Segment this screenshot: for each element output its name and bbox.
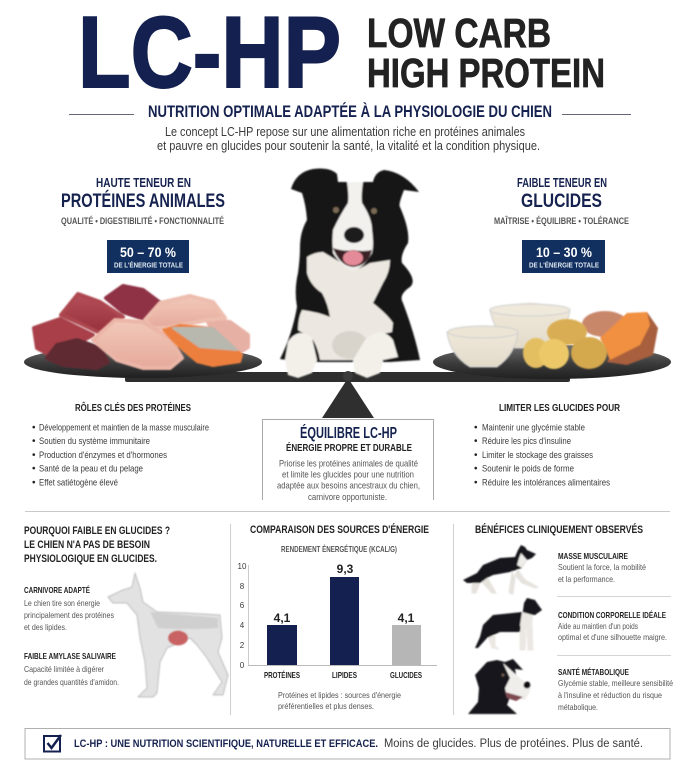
block: carnivore: et des lipides. (24, 622, 67, 632)
list: protein roles: Santé de la peau et du pelage (39, 464, 143, 474)
list: limit carbs: Réduire les intolérances alimentaires (482, 478, 610, 488)
footer banner: Moins de glucides. Plus de protéines. Plus de santé. (384, 738, 643, 750)
title: low carb high protein: HIGH PROTEIN (367, 50, 605, 96)
bar: lipids: 9,3 (337, 562, 354, 576)
chest shading (332, 331, 368, 359)
paws (285, 332, 398, 378)
chart note (278, 690, 401, 711)
panel: balance box: carnivore opportuniste. (308, 492, 387, 503)
central dog (280, 169, 420, 378)
icon: dog head (468, 659, 531, 714)
icon: running dog (463, 545, 538, 594)
panel: proteins heading: PROTÉINES ANIMALES (61, 189, 225, 212)
list: limit carbs: LIMITER LES GLUCIDES POUR (499, 403, 621, 414)
list: protein roles: RÔLES CLÉS DES PROTÉINES (75, 401, 191, 414)
icon: checkbox (44, 735, 61, 752)
panel: carbs heading: MAÎTRISE • ÉQUILIBRE • TOLÉRANCE (494, 215, 629, 226)
left plate with proteins (24, 286, 262, 378)
text: body condition (558, 610, 667, 642)
rice bowls (447, 302, 570, 367)
callout: 10-30% (522, 240, 605, 273)
list: protein roles: Production d'énzymes et d'hormones (39, 450, 167, 461)
panel: proteins heading: QUALITÉ • DIGESTIBILITÉ • FONCTIONNALITÉ (61, 216, 224, 226)
axes: 4 (240, 621, 245, 630)
block: amylase (24, 651, 119, 687)
icon: standing dog (475, 598, 542, 650)
bar: proteins (264, 611, 300, 680)
panel: proteins heading: HAUTE TENEUR EN (96, 175, 191, 190)
list: protein roles: Soutien du système immunitaire (39, 436, 150, 447)
panel: balance box: adaptée aux besoins ancestraux du chien, (277, 480, 420, 492)
panel: carbs heading: GLUCIDES (521, 190, 602, 212)
block: amylase: de grandes quantités d'amidon. (24, 677, 119, 687)
bar: lipids: LIPIDES (332, 670, 357, 680)
bar: lipids (330, 562, 359, 680)
title: LC-HP: LC-HP (78, 0, 341, 109)
text: metabolic health: métabolique. (558, 702, 598, 712)
list: protein roles: Effet satiétogène élevé (39, 478, 118, 488)
panel: balance box: ÉNERGIE PROPRE ET DURABLE (286, 441, 412, 454)
panel: balance box: Priorise les protéines animales de qualité (279, 458, 418, 470)
panel: proteins heading (61, 175, 225, 226)
block: carnivore: principalement des protéines (24, 610, 114, 620)
callout: 50-70% (107, 240, 189, 273)
panel: balance box: et limite les glucides pour une nutrition (282, 470, 414, 480)
list: protein roles: • (32, 450, 36, 461)
list: limit carbs: Réduire les pics d'insuline (482, 436, 571, 447)
anatomy dog illustration (108, 573, 228, 697)
list: protein roles: • (32, 436, 36, 447)
block: carnivore: CARNIVORE ADAPTÉ (24, 585, 90, 595)
eyes (333, 207, 377, 214)
plate (433, 345, 671, 379)
tongue (343, 250, 363, 266)
text: muscle mass (558, 551, 646, 584)
subtitle: NUTRITION OPTIMALE ADAPTÉE À LA PHYSIOLOGIE DU CHIEN (148, 102, 552, 121)
axes: 6 (240, 601, 245, 610)
heading (24, 525, 170, 565)
sweet potato (582, 311, 658, 365)
plate (24, 346, 262, 378)
potatoes (523, 319, 607, 369)
axes: 2 (240, 641, 245, 650)
list: limit carbs: • (474, 422, 478, 434)
bar: proteins: PROTÉINES (264, 670, 300, 680)
salmon (163, 325, 242, 366)
list: limit carbs: • (474, 478, 478, 488)
block: carnivore (24, 585, 114, 632)
text: metabolic health: SANTÉ MÉTABOLIQUE (558, 667, 629, 677)
callout: 50-70%: DE L'ÉNERGIE TOTALE (114, 260, 183, 270)
block: amylase: FAIBLE AMYLASE SALIVAIRE (24, 651, 116, 661)
list: protein roles: • (32, 478, 36, 488)
list: limit carbs: • (474, 464, 478, 474)
list: protein roles: • (32, 464, 36, 474)
panel: carbs heading (494, 175, 629, 226)
panel: energy chart: RENDEMENT ÉNERGÉTIQUE (KCAL/G) (281, 544, 397, 554)
title: low carb high protein (367, 10, 605, 96)
panel: balance box: ÉQUILIBRE LC-HP (300, 423, 397, 442)
title: low carb high protein: LOW CARB (367, 10, 551, 56)
panel: clinical benefits (463, 523, 673, 714)
chicken (93, 296, 248, 368)
chest (298, 252, 393, 360)
panel: why low carb (24, 525, 228, 697)
bar: proteins: 4,1 (274, 611, 291, 625)
panel: energy chart (238, 523, 437, 711)
nose (344, 227, 364, 243)
axes: 10 (238, 562, 247, 571)
callout: 10-30%: 10 – 30 % (536, 244, 592, 260)
heading: LE CHIEN N'A PAS DE BESOIN (24, 539, 150, 551)
text: body condition: optimal et d'une silhouette maigre. (558, 632, 667, 642)
text: muscle mass: MASSE MUSCULAIRE (558, 551, 628, 561)
red meat (34, 286, 159, 368)
chart note: préférentielles et plus denses. (278, 701, 374, 711)
dog body (280, 169, 420, 362)
list: limit carbs: Maintenir une glycémie stable (482, 422, 585, 434)
right plate with carbs (433, 302, 671, 379)
axes: 0 (240, 661, 245, 670)
heading: PHYSIOLOGIQUE EN GLUCIDES. (24, 553, 157, 565)
callout: 10-30%: DE L'ÉNERGIE TOTALE (529, 260, 599, 270)
list: limit carbs: Limiter le stockage des graisses (482, 450, 593, 461)
list: protein roles: Développement et maintien de la masse musculaire (39, 422, 209, 434)
panel: clinical benefits: BÉNÉFICES CLINIQUEMENT OBSERVÉS (475, 523, 643, 536)
list: limit carbs (474, 403, 621, 488)
panel: energy chart: COMPARAISON DES SOURCES D'ÉNERGIE (250, 523, 429, 536)
panel: carbs heading: FAIBLE TENEUR EN (517, 175, 607, 190)
callout: 50-70%: 50 – 70 % (120, 244, 176, 260)
block: amylase: Capacité limitée à digérer (24, 664, 104, 674)
list: limit carbs: Soutenir le poids de forme (482, 464, 574, 474)
bar: carbs: 4,1 (398, 611, 415, 625)
block: carnivore: Le chien tire son énergie (24, 598, 100, 608)
axes: 8 (240, 582, 245, 591)
text: metabolic health: à l'insuline et réduction du risque (558, 690, 662, 700)
footer banner (25, 728, 670, 759)
panel: balance box (262, 420, 434, 503)
intro text: et pauvre en glucides pour soutenir la santé, la vitalité et la condition physique. (157, 139, 540, 153)
text: muscle mass: Soutient la force, la mobilité (558, 562, 646, 572)
text: body condition: CONDITION CORPORELLE IDÉALE (558, 610, 666, 620)
text: muscle mass: et la performance. (558, 574, 615, 584)
footer banner: LC-HP : UNE NUTRITION SCIENTIFIQUE, NATURELLE ET EFFICACE. (74, 738, 378, 750)
list: protein roles: • (32, 422, 36, 434)
axes (238, 562, 437, 670)
blaze and muzzle (332, 182, 373, 270)
text: body condition: Aide au maintien d'un poids (558, 621, 638, 631)
mouth (333, 248, 372, 267)
chart note: Protéines et lipides : sources d'énergie (278, 690, 401, 700)
list: protein roles (32, 401, 209, 488)
intro text: Le concept LC-HP repose sur une alimentation riche en protéines animales (165, 125, 525, 139)
bar: carbs: GLUCIDES (390, 670, 422, 680)
heading: POURQUOI FAIBLE EN GLUCIDES ? (24, 525, 170, 537)
list: limit carbs: • (474, 436, 478, 447)
list: limit carbs: • (474, 450, 478, 461)
bar: carbs (390, 611, 422, 680)
text: metabolic health (558, 667, 673, 712)
intro text (157, 125, 540, 153)
scale beam and pivot (125, 371, 570, 418)
text: metabolic health: Glycémie stable, meilleure sensibilité (558, 678, 673, 688)
